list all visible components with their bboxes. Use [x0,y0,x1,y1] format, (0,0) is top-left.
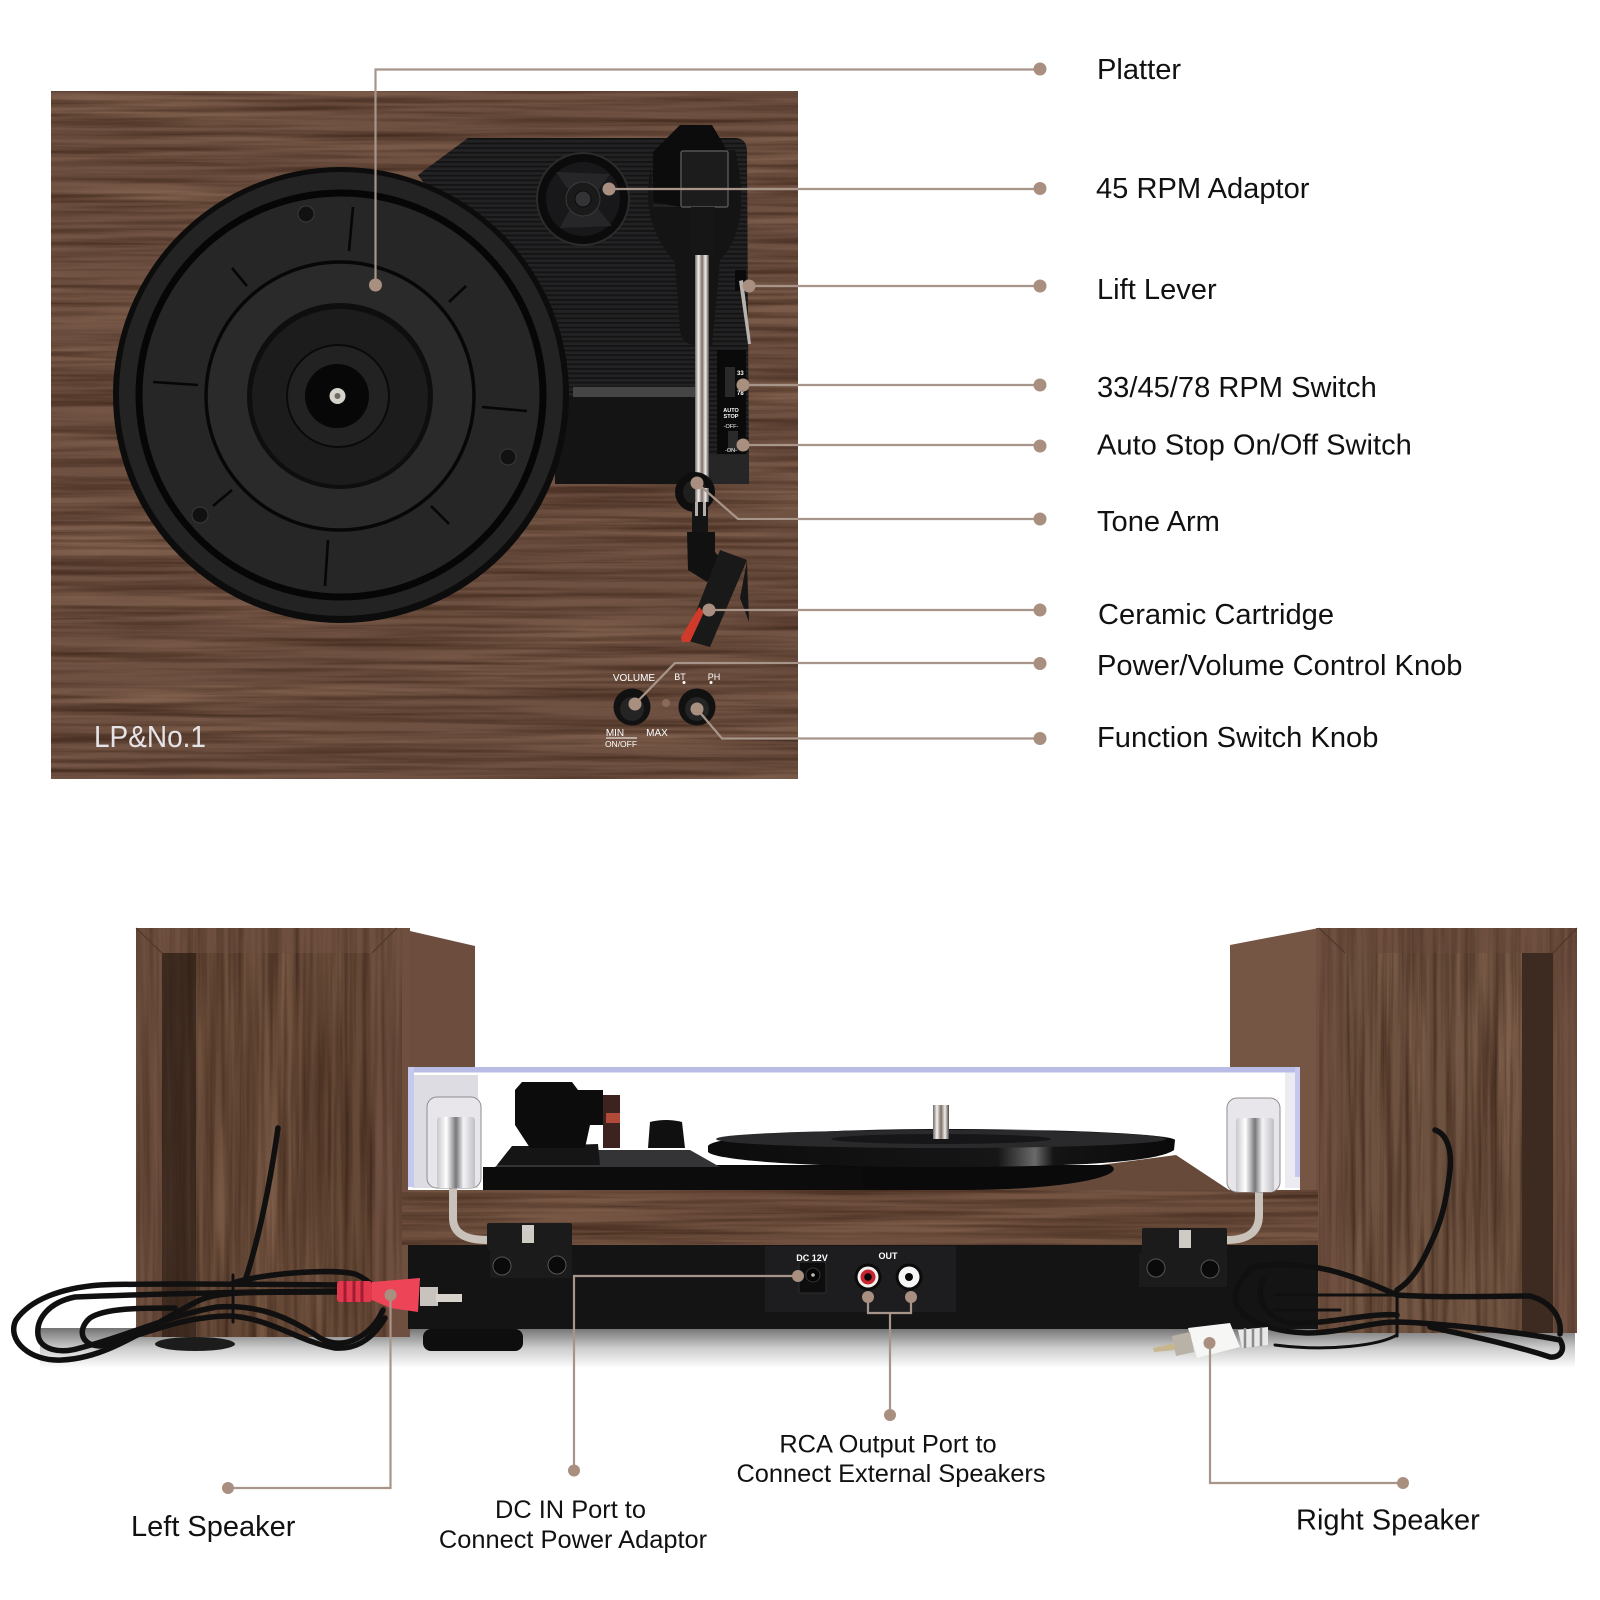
callout: Ceramic Cartridge [702,599,1334,631]
knobs and control labels: MIN [606,728,624,739]
wood plinth [51,91,798,779]
tonearm base plate [418,138,749,484]
RCA output jacks: OUT [878,1251,898,1261]
callout: Ceramic Cartridge: Ceramic Cartridge [1098,599,1334,631]
speed and auto stop switch panel: STOP [724,414,739,420]
RCA output jacks [854,1251,922,1290]
panel: turntable rear view [14,928,1577,1368]
platter screws [192,206,516,523]
callout: DC IN Port: DC IN Port to [495,1496,646,1524]
wood base edge [402,1190,1318,1245]
right speaker cable with white RCA plug [1153,1265,1562,1358]
left speaker cable with red RCA plug [14,1272,462,1360]
left speaker [136,928,475,1337]
DC jack [796,1253,828,1293]
knobs and control labels: ON/OFF [605,739,637,749]
right speaker [1230,928,1577,1333]
callout: 33/45/78 RPM Switch [736,372,1377,404]
tone arm [648,125,741,534]
lift lever [735,270,751,344]
callout: Platter: Platter [1097,54,1181,86]
callout: Platter [369,54,1181,292]
platter ticks [153,207,527,586]
speed and auto stop switch panel: AUTO [723,408,739,414]
speed and auto stop switch panel: -OFF- [724,424,738,430]
callout: Left Speaker [131,1289,396,1543]
callout: Power/Volume Control Knob [628,650,1462,710]
callout: 45 RPM Adaptor [602,173,1310,205]
speed and auto stop switch panel: 33 [737,371,744,377]
record plate and cartridge inside cover [483,1082,1232,1192]
callout: Lift Lever [742,274,1217,306]
callout: Function Switch Knob [690,702,1378,754]
callout: Tone Arm [690,476,1220,538]
speed and auto stop switch panel [717,350,746,454]
knobs and control labels [605,672,720,749]
speed and auto stop switch panel: -ON- [725,448,737,454]
45 RPM adaptor [537,153,629,245]
platter [113,167,569,623]
callout: Tone Arm: Tone Arm [1097,506,1220,538]
callout: RCA Output Port [736,1291,1046,1488]
ceramic cartridge [681,532,749,647]
callout: 33/45/78 RPM Switch: 33/45/78 RPM Switch [1097,372,1377,404]
floor shadow [40,1328,1575,1368]
callout: 45 RPM Adaptor: 45 RPM Adaptor [1096,173,1310,205]
callout: RCA Output Port: Connect External Speakers [736,1460,1046,1488]
callout: Auto Stop On/Off Switch [736,430,1412,462]
DC jack: DC 12V [796,1253,828,1263]
callout: DC IN Port: Connect Power Adaptor [439,1526,708,1554]
callout: Left Speaker: Left Speaker [131,1511,296,1543]
platter side view [708,1105,1175,1167]
left hinge [427,1097,572,1278]
knobs and control labels: VOLUME [613,673,655,684]
callout: DC IN Port [439,1270,804,1554]
callout: Right Speaker: Right Speaker [1296,1504,1480,1536]
panel: turntable top view [51,91,798,779]
callout: Right Speaker [1204,1337,1480,1536]
knobs and control labels: PH [708,672,720,682]
right hinge [1139,1098,1280,1287]
callout: Lift Lever: Lift Lever [1097,274,1217,306]
dust cover [408,1067,1300,1190]
black rear base [408,1245,1318,1351]
logo: LP&No.1 [94,719,206,754]
callout: Auto Stop On/Off Switch: Auto Stop On/Off Switch [1097,430,1412,462]
callout: Power/Volume Control Knob: Power/Volume Control Knob [1097,650,1462,682]
knobs and control labels: MAX [646,728,668,739]
callout: Function Switch Knob: Function Switch Knob [1097,722,1378,754]
callout: RCA Output Port: RCA Output Port to [779,1430,997,1458]
speed and auto stop switch panel: 78 [737,391,744,397]
knobs and control labels: BT [674,672,686,682]
